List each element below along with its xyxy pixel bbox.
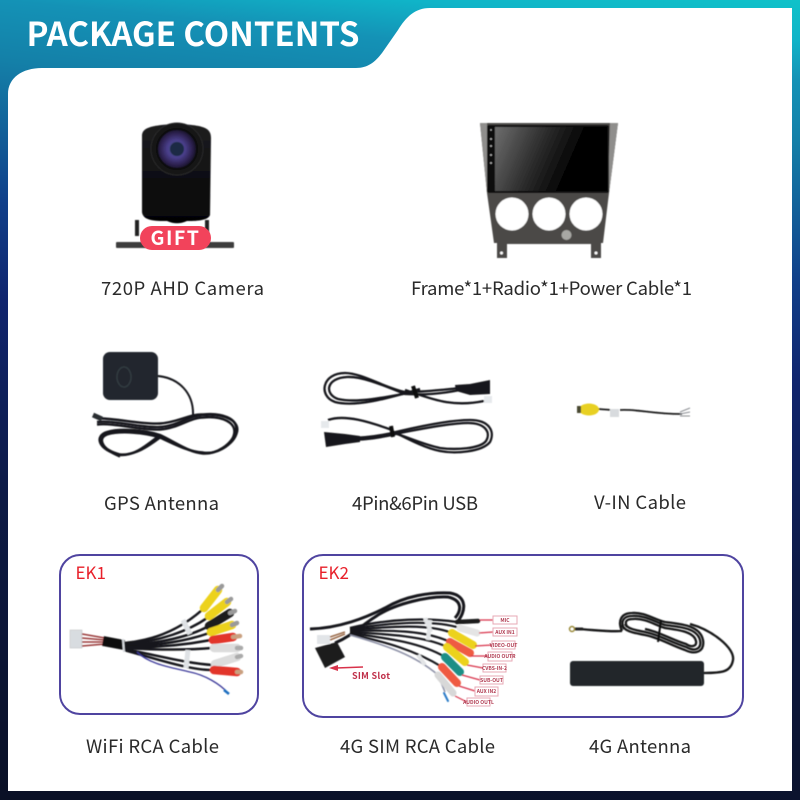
SIM slot text: SIM Slot bbox=[352, 669, 390, 682]
4G antenna bbox=[570, 613, 733, 686]
cable port tags: MIC bbox=[500, 617, 510, 624]
EK1 RCA cable bbox=[70, 586, 241, 694]
V-IN cable wire bbox=[598, 409, 682, 414]
GPS puck bbox=[103, 352, 158, 400]
EK1 tag: EK1 bbox=[76, 559, 106, 584]
label: USB cables: 4Pin&6Pin USB bbox=[352, 490, 478, 516]
cable port tags: AUDIO OUTR bbox=[483, 653, 516, 660]
camera body bbox=[142, 124, 211, 223]
SIM slot arrow bbox=[329, 665, 363, 671]
SIM slot box bbox=[315, 642, 345, 668]
EK2 RCA cable bbox=[310, 593, 493, 702]
item: GPS antenna bbox=[93, 352, 237, 456]
GPS connector bbox=[93, 415, 102, 419]
label: V-IN cable: V-IN Cable bbox=[594, 489, 686, 515]
panel: EK1 bbox=[60, 555, 258, 714]
antenna cable bbox=[578, 613, 733, 673]
cable port tags: AUDIO OUTL bbox=[462, 699, 494, 706]
upper USB cable bbox=[325, 373, 484, 404]
item: camera bbox=[116, 123, 234, 248]
camera bracket bbox=[116, 242, 234, 248]
item: radio with frame bbox=[480, 123, 618, 258]
label: camera: 720P AHD Camera bbox=[101, 275, 264, 301]
label: radio: Frame*1+Radio*1+Power Cable*1 bbox=[411, 275, 692, 301]
cable port tags: AUX IN1 bbox=[494, 629, 515, 636]
label: 4G SIM RCA cable: 4G SIM RCA Cable bbox=[340, 733, 495, 759]
label: 4G antenna: 4G Antenna bbox=[589, 733, 691, 759]
title: PACKAGE CONTENTS bbox=[26, 8, 360, 56]
EK2 tag: EK2 bbox=[318, 559, 349, 584]
item: USB cables bbox=[321, 373, 492, 452]
cable port tags: AUX IN2 bbox=[476, 688, 496, 695]
item: V-IN cable bbox=[577, 404, 690, 417]
vent cut-outs bbox=[496, 198, 528, 230]
camera lens bbox=[151, 123, 203, 175]
cable port tags bbox=[462, 616, 517, 706]
EK2 border bbox=[303, 555, 743, 717]
cable port tags: SUB-OUT bbox=[480, 677, 503, 684]
label: WiFi RCA cable: WiFi RCA Cable bbox=[86, 733, 219, 759]
label: GPS antenna: GPS Antenna bbox=[104, 490, 219, 516]
radio frame bbox=[480, 123, 618, 258]
antenna bar bbox=[570, 661, 704, 686]
cable port tags: VIDEO-OUT bbox=[489, 642, 517, 649]
radio screen bbox=[487, 125, 609, 193]
GPS cable bbox=[158, 376, 193, 416]
cable port tags: CVBS-IN-2 bbox=[482, 665, 507, 672]
lower USB cable bbox=[328, 418, 492, 452]
panel: EK2 bbox=[303, 555, 743, 717]
V-IN yellow plug bbox=[579, 404, 599, 416]
gift badge: GIFT bbox=[150, 222, 201, 251]
EK1 border bbox=[60, 555, 258, 714]
